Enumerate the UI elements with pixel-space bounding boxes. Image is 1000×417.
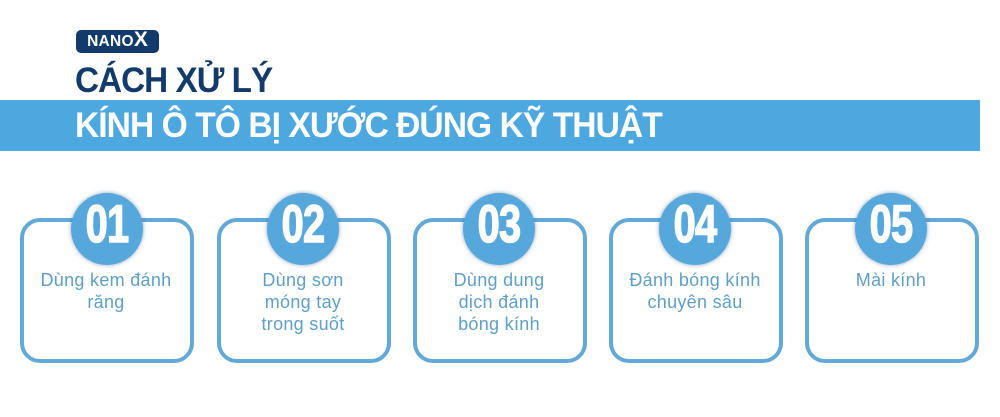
card 3 text	[454, 270, 544, 334]
title line 1: CÁCH XỬ LÝ	[75, 61, 272, 100]
card 5 text: Mài kính	[856, 270, 926, 290]
card 2 frame	[217, 218, 391, 363]
card 1 text: Dùng kem đánh	[40, 270, 171, 290]
card 2 text: Dùng sơn	[262, 270, 344, 290]
card 4 frame	[609, 218, 783, 363]
card 1 number badge	[71, 193, 143, 265]
card 4 text	[629, 270, 761, 312]
card 1 text: răng	[87, 292, 125, 312]
card 2	[217, 190, 391, 363]
card 4 number: 04	[674, 195, 716, 254]
logo: NanoX badge: NANOX	[87, 28, 148, 51]
card 3 frame	[413, 218, 587, 363]
card 4 number badge	[659, 193, 731, 265]
card 1	[20, 190, 194, 363]
card 4 text: Đánh bóng kính	[629, 270, 761, 290]
card 5 number badge	[855, 193, 927, 265]
card 4	[609, 190, 783, 363]
card 3 number: 03	[478, 195, 520, 254]
card 2 text	[261, 270, 345, 334]
card 1 number: 01	[86, 195, 128, 254]
card 2 text: trong suốt	[261, 314, 345, 334]
card 5 number: 05	[870, 195, 912, 254]
card 3 text: dịch đánh	[459, 292, 539, 312]
card 3 number badge	[463, 193, 535, 265]
card 3 text: Dùng dung	[454, 270, 544, 290]
title band	[0, 100, 980, 151]
card 5	[805, 190, 979, 363]
card 3	[413, 190, 587, 363]
card 2 number badge	[267, 193, 339, 265]
card 1 frame	[20, 218, 194, 363]
card 3 text: bóng kính	[458, 314, 540, 334]
card 5 frame	[805, 218, 979, 363]
card 1 text	[40, 270, 171, 312]
card 2 text: móng tay	[265, 292, 341, 312]
card 2 number: 02	[282, 195, 324, 254]
title line 2: KÍNH Ô TÔ BỊ XƯỚC ĐÚNG KỸ THUẬT	[75, 106, 662, 145]
card 4 text: chuyên sâu	[647, 292, 743, 312]
logo: NanoX badge	[76, 30, 159, 53]
